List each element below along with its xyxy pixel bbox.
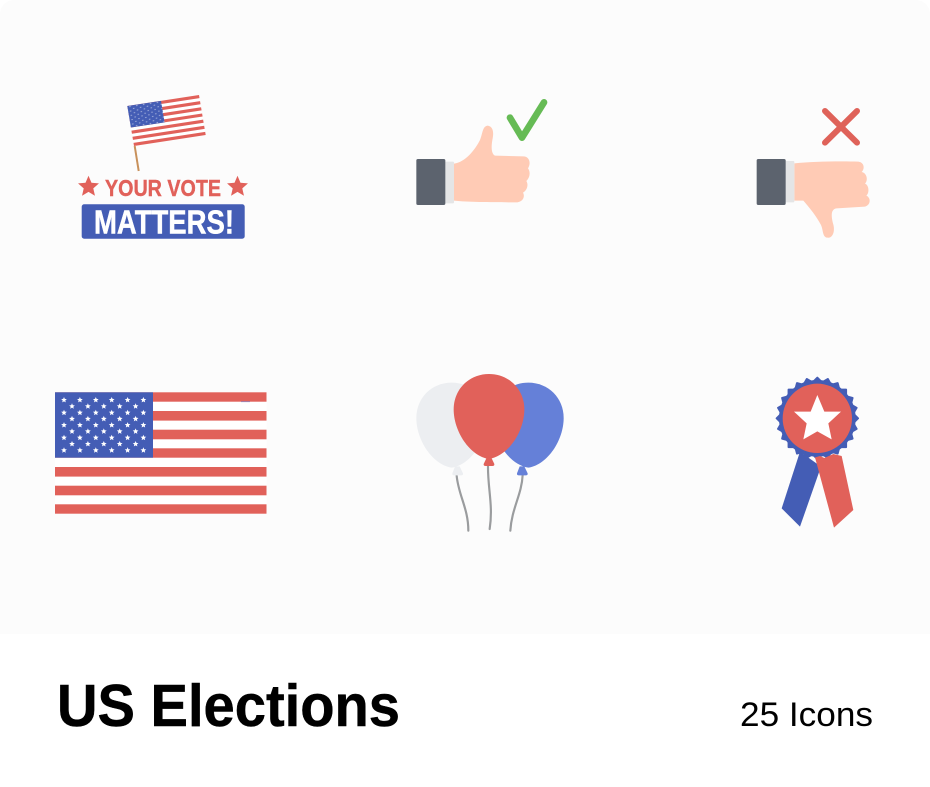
text: your vote: YOUR VOTE (105, 175, 221, 201)
grey balloon (416, 383, 487, 475)
jacket sleeve (757, 159, 786, 205)
blue canton (55, 392, 153, 458)
red medallion (783, 384, 852, 453)
red balloon (454, 374, 524, 466)
red ribbon tail (815, 454, 853, 528)
red stripes (55, 392, 266, 514)
text: matters: MATTERS! (94, 203, 234, 240)
hand (454, 126, 530, 202)
title: US Elections (57, 673, 400, 739)
scalloped rosette (760, 361, 875, 476)
balloon strings (457, 466, 523, 531)
jacket sleeve (416, 159, 445, 205)
blue balloon (493, 383, 564, 475)
white star (794, 395, 841, 439)
shirt cuff (445, 162, 454, 203)
fifty stars (61, 397, 146, 453)
icon count label: 25 Icons (740, 696, 873, 734)
banner: matters (82, 204, 245, 239)
icon: large american flag (55, 392, 266, 514)
icon: award ribbon with star (760, 361, 875, 528)
shirt cuff (785, 161, 794, 202)
icon: thumbs down with cross (757, 111, 870, 238)
check mark (510, 102, 544, 138)
right star (227, 176, 248, 196)
small waving flag (127, 95, 206, 146)
hand (794, 161, 870, 238)
white field (55, 392, 266, 514)
flag pole (135, 146, 139, 171)
blue ribbon tail (782, 452, 821, 527)
icon: your vote matters sign (78, 95, 248, 240)
cross mark (825, 111, 857, 143)
icon: three balloons (416, 374, 564, 531)
icon: thumbs up with check mark (416, 102, 544, 205)
left star (78, 176, 99, 196)
